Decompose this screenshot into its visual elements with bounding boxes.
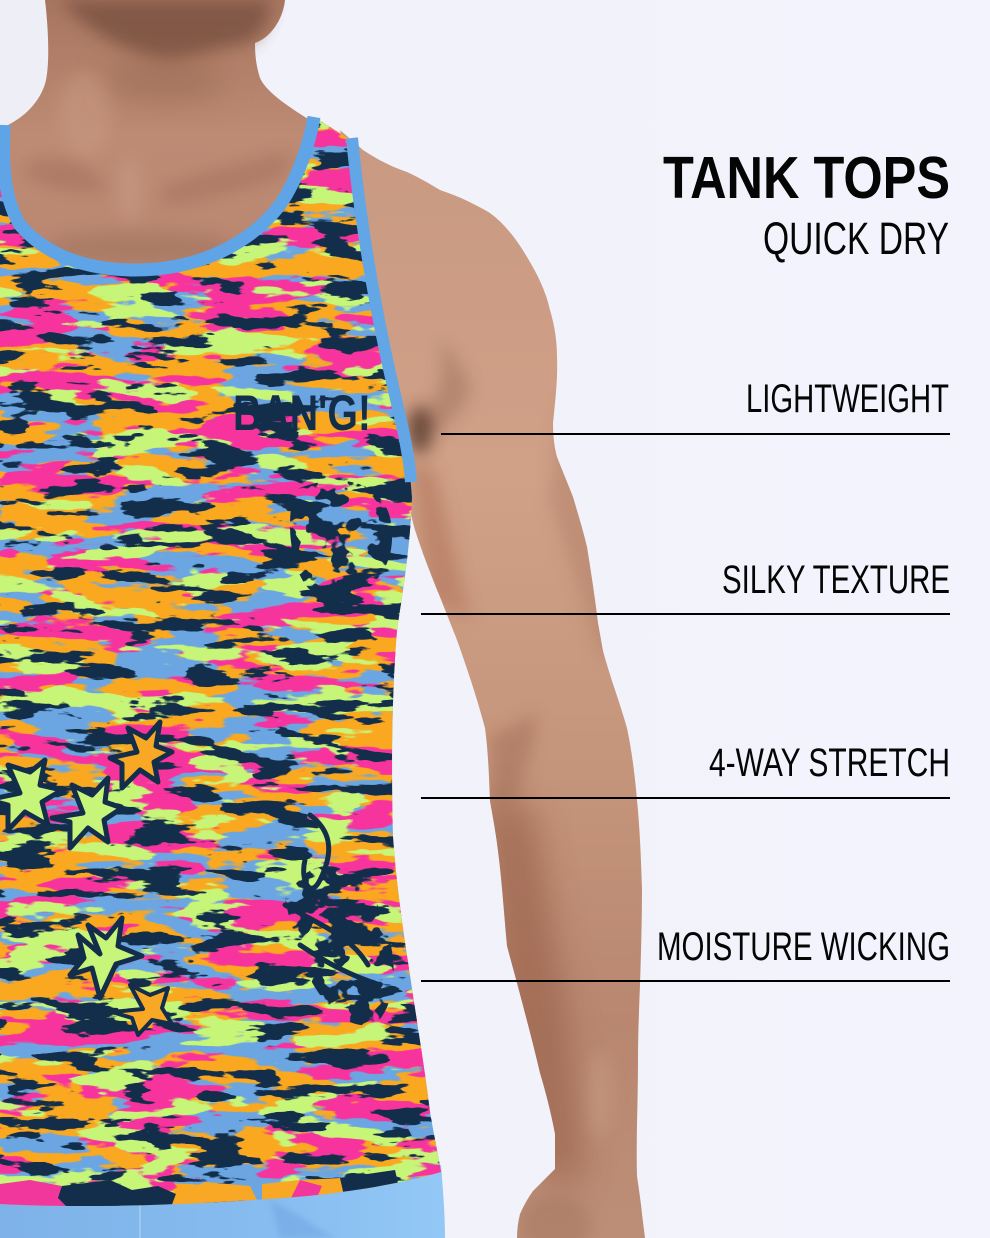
upper arm right edge shade <box>550 439 604 656</box>
forearm inner shade <box>480 790 585 1180</box>
torso and neck skin <box>0 0 420 400</box>
armhole trim <box>352 138 411 482</box>
elbow crease <box>490 710 536 800</box>
neckline trim <box>3 117 314 270</box>
neck left highlight <box>59 73 111 157</box>
chest hair shade <box>45 232 235 264</box>
tank top <box>0 100 460 1238</box>
arm and shoulder skin <box>330 120 660 1238</box>
shorts <box>0 1165 445 1238</box>
tropical flower centre <box>52 778 122 848</box>
shorts seam <box>139 1205 141 1238</box>
inner upper-arm warm shade <box>410 460 470 620</box>
camouflage print <box>0 100 460 1238</box>
tropical flower lower centre <box>112 985 172 1035</box>
heading: tank tops: TANK TOPS <box>663 145 950 211</box>
shoulder crease <box>423 349 472 435</box>
chest logo print: BAN'G! <box>233 385 371 441</box>
collarbone shadows <box>25 150 290 205</box>
tropical flower lower left <box>70 918 142 998</box>
tropical flower at left <box>0 760 62 830</box>
hem print patches <box>0 1170 398 1206</box>
sternum highlight <box>117 156 143 224</box>
palm branches on the side <box>285 815 380 985</box>
model: skin of neck, shoulder and arm <box>0 0 660 1238</box>
shorts fold <box>270 1200 335 1238</box>
tropical flower upper <box>110 722 172 788</box>
wrist highlight <box>592 1066 608 1124</box>
chin stubble shadow <box>60 0 270 60</box>
dense foliage print <box>285 481 394 1026</box>
armpit hair shadow <box>408 406 432 454</box>
hand shade <box>519 1195 591 1238</box>
neck under-chin tone <box>105 58 225 102</box>
